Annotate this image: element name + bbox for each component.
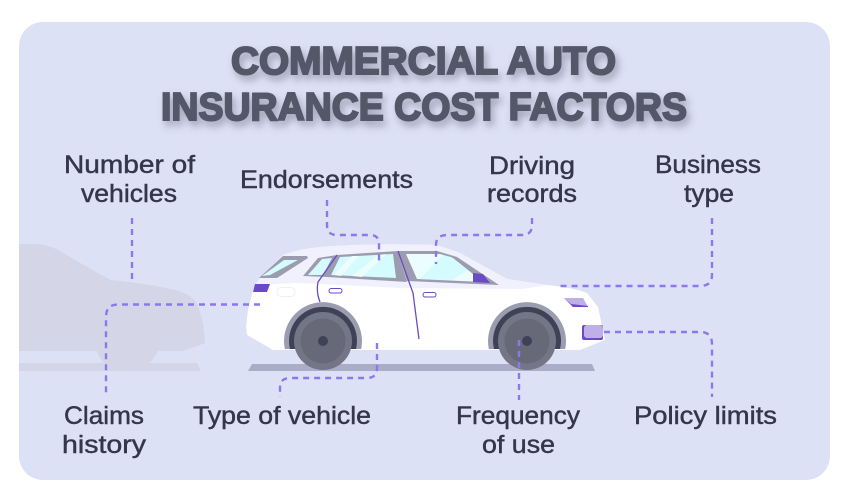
connector: frequency of use xyxy=(518,340,520,400)
label: claims history: history xyxy=(62,431,147,459)
connector: number of vehicles xyxy=(131,218,133,281)
label: business type: Business xyxy=(655,151,761,179)
faded background car xyxy=(19,244,205,371)
connector: driving records xyxy=(436,218,532,264)
front window xyxy=(398,251,499,285)
title: COMMERCIAL AUTO xyxy=(231,40,616,83)
label: endorsements: Endorsements xyxy=(240,166,413,194)
bumper light xyxy=(582,325,603,340)
door handles xyxy=(329,288,342,293)
label: driving records xyxy=(487,152,577,208)
title: INSURANCE COST FACTORS xyxy=(161,86,687,129)
side mirror xyxy=(473,273,490,283)
title xyxy=(161,40,687,129)
label: driving records: Driving xyxy=(489,152,575,180)
label: frequency of use xyxy=(456,402,581,459)
label: driving records: records xyxy=(487,180,577,208)
connector: business type xyxy=(558,218,712,286)
door lines xyxy=(317,251,419,339)
rear window xyxy=(259,256,308,278)
label: number of vehicles: Number of xyxy=(64,151,195,179)
head light xyxy=(564,298,588,307)
label: type of vehicle: Type of vehicle xyxy=(193,402,371,430)
label: frequency of use: of use xyxy=(482,431,555,459)
label: policy limits: Policy limits xyxy=(634,402,777,430)
label: business type xyxy=(655,151,761,208)
connector: policy limits xyxy=(604,332,712,397)
upper body tint xyxy=(255,244,547,289)
car illustration xyxy=(246,244,605,371)
label: claims history: Claims xyxy=(64,402,144,430)
connector: endorsements xyxy=(327,200,379,265)
label: claims history xyxy=(62,402,147,459)
front wheel xyxy=(488,302,566,370)
rear quarter window xyxy=(303,255,337,277)
connector: type of vehicle xyxy=(280,343,377,397)
car body xyxy=(246,244,605,350)
rear plate xyxy=(277,288,295,296)
label: business type: type xyxy=(684,180,734,208)
rear wheel xyxy=(284,302,362,370)
middle window xyxy=(327,251,407,282)
label: number of vehicles: vehicles xyxy=(81,180,177,208)
label: frequency of use: Frequency xyxy=(456,402,581,430)
connector: claims history xyxy=(106,304,260,397)
label: number of vehicles xyxy=(64,151,195,208)
rear light xyxy=(253,284,270,292)
ground shadow xyxy=(248,364,595,371)
